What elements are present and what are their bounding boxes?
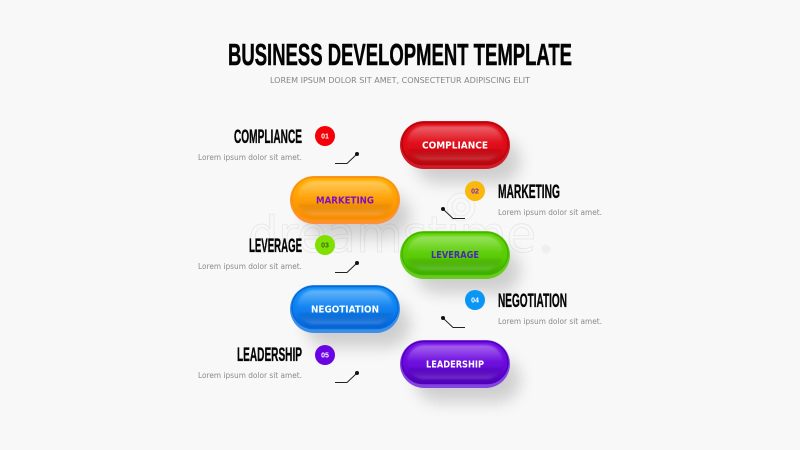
pill: compliance: [400, 121, 520, 183]
item 01: compliance: COMPLIANCE: [234, 127, 302, 148]
subtitle: LOREM IPSUM DOLOR SIT AMET, CONSECTETUR ADIPISCING ELIT: [270, 76, 530, 85]
item 04: negotiation: 04: [471, 298, 479, 304]
item 04: negotiation: [441, 290, 602, 328]
item 05: leadership: LEADERSHIP: [237, 345, 302, 366]
item 03: leverage: [198, 235, 359, 272]
pill: marketing: MARKETING: [316, 196, 374, 206]
item 05: leadership: [198, 345, 359, 382]
watermark: dreamstime: [248, 206, 536, 264]
item 01: compliance: 01: [321, 134, 329, 140]
item 01: compliance: [198, 126, 359, 164]
pill: negotiation: [290, 285, 410, 347]
item 03: leverage: 03: [321, 242, 329, 250]
item 03: leverage: LEVERAGE: [249, 236, 302, 257]
item 04: negotiation: NEGOTIATION: [498, 291, 567, 312]
pill: leadership: LEADERSHIP: [426, 360, 484, 370]
pill: marketing: [290, 176, 410, 238]
pill: compliance: COMPLIANCE: [422, 140, 488, 152]
pill: negotiation: NEGOTIATION: [311, 304, 379, 316]
pill: leverage: [400, 231, 520, 293]
title: BUSINESS DEVELOPMENT TEMPLATE: [228, 37, 572, 72]
pill: leadership: [400, 340, 520, 402]
item 02: marketing: [441, 181, 602, 218]
item 02: marketing: MARKETING: [498, 182, 560, 203]
item 04: negotiation: Lorem ipsum dolor sit amet.: [498, 317, 602, 326]
item 03: leverage: Lorem ipsum dolor sit amet.: [198, 262, 302, 271]
item 05: leadership: 05: [321, 352, 329, 360]
item 01: compliance: Lorem ipsum dolor sit amet.: [198, 153, 302, 162]
item 05: leadership: Lorem ipsum dolor sit amet.: [198, 371, 302, 380]
item 02: marketing: 02: [471, 188, 479, 196]
item 02: marketing: Lorem ipsum dolor sit amet.: [498, 208, 602, 217]
pill: leverage: LEVERAGE: [431, 250, 479, 261]
